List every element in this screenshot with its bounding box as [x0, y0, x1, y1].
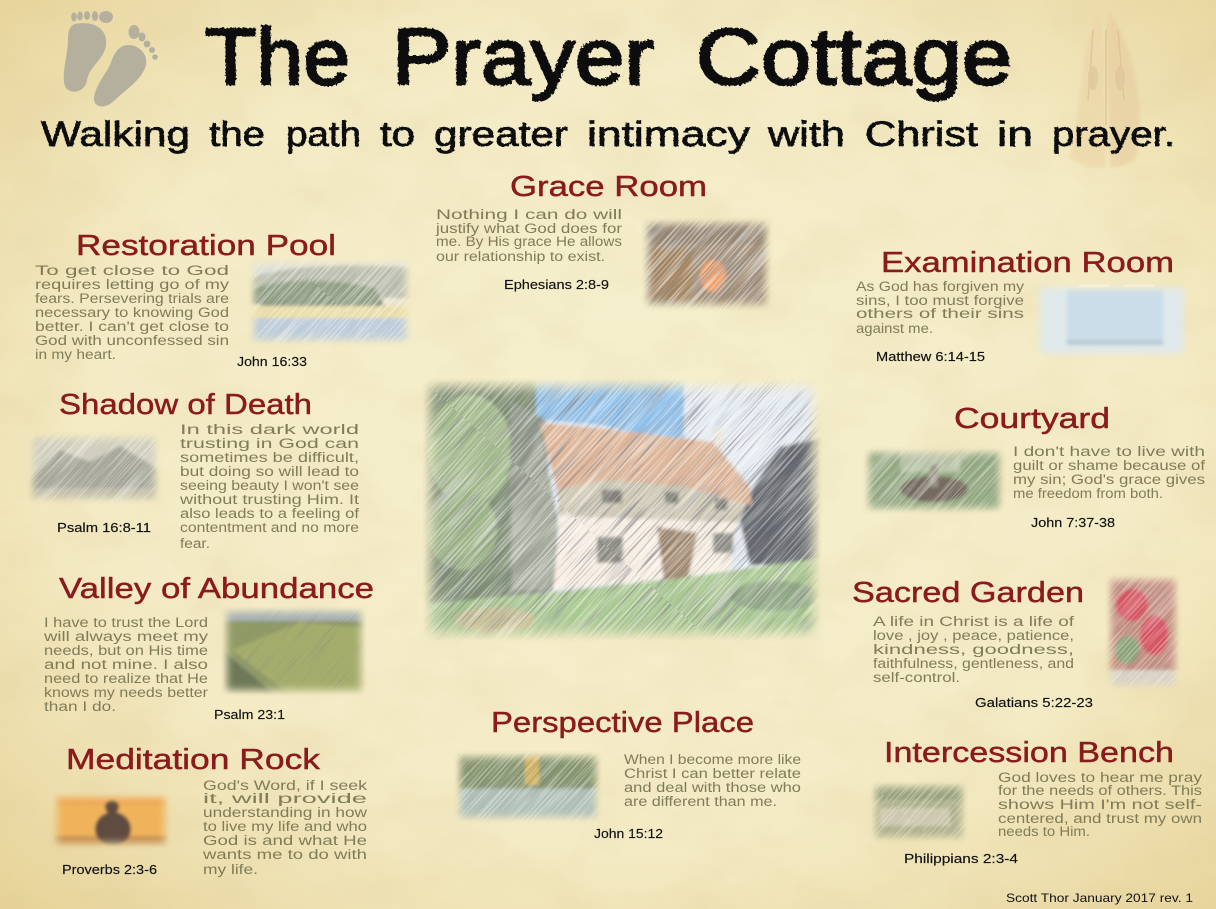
text: Courtyard description: my sin; God's grace gives — [1013, 472, 1205, 487]
text: Restoration Pool description: fears. Persevering trials are — [35, 291, 229, 306]
text: Shadow of Death description: contentment and no more — [180, 520, 359, 535]
text: Valley of Abundance description: knows my needs better — [44, 685, 209, 700]
text: Shadow of Death description: fear. — [180, 536, 210, 551]
title: Cottage — [696, 12, 1012, 101]
image: lake with trees — [455, 752, 601, 822]
text: Valley of Abundance description: I have to trust the Lord — [44, 615, 208, 630]
text: Grace Room description: our relationship to exist. — [436, 249, 605, 264]
text: Restoration Pool description: To get close to God — [35, 263, 229, 278]
text: Sacred Garden description — [873, 614, 1074, 685]
panel: Perspective Place — [455, 707, 801, 841]
subtitle: Christ — [865, 115, 978, 154]
text: Intercession Bench description: needs to Him. — [998, 824, 1090, 839]
text: Shadow of Death description: but doing so will lead to — [180, 464, 359, 479]
panel: Examination Room — [856, 247, 1190, 364]
text: Examination Room description: As God has forgiven my — [856, 279, 1024, 294]
text: Courtyard description: I don't have to live with — [1013, 444, 1205, 459]
text: Perspective Place description — [624, 752, 801, 809]
subtitle: in — [997, 115, 1033, 154]
text: Grace Room description: me. By His grace He allows — [436, 234, 622, 249]
heading: Restoration Pool: Restoration Pool — [76, 230, 336, 262]
text: Shadow of Death description: without trusting Him. It — [179, 492, 359, 507]
text: Intercession Bench description: centered, and trust my own — [998, 811, 1202, 826]
skylights — [1079, 286, 1154, 287]
image: terraced valley — [222, 607, 366, 695]
subtitle: greater — [434, 115, 568, 154]
reference: John 16:33: John 16:33 — [237, 354, 307, 369]
text: Shadow of Death description: also leads to a feeling of — [180, 506, 359, 521]
text: Meditation Rock description: to live my life and who — [203, 819, 367, 834]
text: Meditation Rock description: wants me to do with — [202, 847, 367, 862]
text: Restoration Pool description: in my heart. — [35, 347, 116, 362]
text: Shadow of Death description: sometimes be difficult, — [180, 450, 359, 465]
panel: Shadow of Death — [28, 389, 359, 551]
text: Sacred Garden description: faithfulness, gentleness, and — [873, 656, 1074, 671]
panel: Valley of Abundance — [43, 573, 374, 722]
text: Intercession Bench description: for the needs of others. This — [998, 783, 1202, 798]
text: Meditation Rock description — [202, 778, 367, 877]
reference: Psalm 23: Psalm 23:1 — [214, 707, 285, 722]
text: Sacred Garden description: love , joy , peace, patience, — [873, 628, 1074, 643]
text: Restoration Pool description: necessary to knowing God — [35, 305, 229, 320]
text: Shadow of Death description: In this dark world — [180, 422, 359, 437]
heading: Perspective Place: Perspective Place — [491, 707, 754, 739]
subtitle: with — [767, 115, 845, 154]
panel: Courtyard — [863, 403, 1205, 530]
title — [205, 12, 1012, 101]
text: Meditation Rock description: God is and what He — [203, 833, 367, 848]
text: Perspective Place description: Christ I can better relate — [624, 766, 801, 781]
image: rose trellis — [1106, 575, 1180, 690]
image: garden bench — [871, 782, 967, 842]
reference: John 15: John 15:12 — [594, 826, 663, 841]
subtitle: path — [286, 115, 361, 154]
text: Restoration Pool description: better. I can't get close to — [35, 319, 229, 334]
text: Shadow of Death description: seeing beauty I won't see — [180, 478, 359, 493]
subtitle: Walking — [41, 115, 190, 154]
subtitle — [41, 115, 1175, 154]
text: Restoration Pool description: God with unconfessed sin — [35, 333, 229, 348]
text: Courtyard description: guilt or shame because of — [1013, 458, 1205, 473]
panel: Meditation Rock — [52, 744, 367, 877]
reference: Ephesians: Ephesians 2:8-9 — [504, 277, 609, 292]
reference: Proverbs: Proverbs 2:3-6 — [62, 862, 157, 877]
reference: Matthew: Matthew 6:14-15 — [876, 349, 985, 364]
footer credit: Scott Thor January 2017 rev. 1 — [1006, 891, 1193, 905]
text: Sacred Garden description: self-control. — [873, 670, 960, 685]
image: sunset meditation — [52, 793, 170, 848]
text: Shadow of Death description — [179, 422, 359, 551]
text: Intercession Bench description: God loves to hear me pray — [998, 770, 1202, 785]
text: Perspective Place description: and deal with those who — [624, 780, 801, 795]
heading: Shadow of Death: Shadow of Death — [59, 389, 312, 421]
text: Examination Room description: sins, I too must forgive — [856, 293, 1024, 308]
text: Meditation Rock description: God's Word, if I seek — [203, 778, 367, 793]
subtitle: intimacy — [587, 115, 751, 154]
image: fireplace — [642, 218, 772, 310]
icon: footprints — [64, 11, 158, 106]
text: Intercession Bench description: shows Him I'm not self- — [998, 797, 1202, 812]
text: Restoration Pool description: requires letting go of my — [35, 277, 229, 292]
image: dark valley — [28, 433, 160, 503]
text: Sacred Garden description: kindness, goodness, — [873, 642, 1074, 657]
text: Perspective Place description: are different than me. — [624, 794, 777, 809]
subtitle: prayer. — [1052, 115, 1175, 154]
heading: Sacred Garden: Sacred Garden — [852, 577, 1084, 609]
image: white room — [1033, 282, 1190, 358]
text: Valley of Abundance description: than I do. — [44, 699, 116, 714]
panel: Restoration Pool — [35, 230, 412, 369]
text: Courtyard description — [1013, 444, 1205, 501]
text: Examination Room description: against me. — [856, 321, 933, 336]
panel: Sacred Garden — [852, 575, 1180, 710]
text: Intercession Bench description — [998, 770, 1202, 839]
text: Examination Room description: others of their sins — [856, 306, 1024, 321]
text: Valley of Abundance description: need to realize that He — [44, 671, 208, 686]
reference: John 7: John 7:37-38 — [1031, 515, 1115, 530]
text: Valley of Abundance description — [43, 615, 209, 714]
panel: Grace Room — [435, 171, 772, 310]
text: Valley of Abundance description: and not mine. I also — [44, 657, 208, 672]
subtitle: to — [380, 115, 415, 154]
text: Restoration Pool description — [35, 263, 229, 362]
text: Shadow of Death description: trusting in God can — [180, 436, 359, 451]
text: Courtyard description: me freedom from both. — [1013, 486, 1163, 501]
reference: Galatians: Galatians 5:22-23 — [975, 695, 1093, 710]
text: Grace Room description: Nothing I can do will — [436, 207, 622, 222]
reference: Psalm 16: Psalm 16:8-11 — [57, 520, 151, 535]
heading: Grace Room: Grace Room — [510, 171, 707, 203]
text: Grace Room description: justify what God does for — [435, 221, 623, 236]
text: Valley of Abundance description: needs, but on His time — [44, 643, 208, 658]
title: Prayer — [392, 12, 654, 101]
image: cottage — [424, 380, 820, 640]
text: Examination Room description — [856, 279, 1024, 336]
heading: Examination Room: Examination Room — [881, 247, 1174, 279]
reference: Philippians: Philippians 2:3-4 — [904, 851, 1018, 866]
text: Perspective Place description: When I become more like — [624, 752, 801, 767]
text: Meditation Rock description: understanding in how — [203, 805, 367, 820]
subtitle: the — [209, 115, 265, 154]
panel: Intercession Bench — [871, 737, 1202, 866]
heading: Courtyard: Courtyard — [954, 403, 1110, 435]
icon: praying hands — [1069, 13, 1140, 167]
text: Meditation Rock description: my life. — [203, 862, 258, 877]
title: The — [205, 12, 350, 101]
text: Grace Room description — [435, 207, 623, 264]
text: Valley of Abundance description: will always meet my — [43, 629, 208, 644]
text: Meditation Rock description: it, will provide — [203, 791, 367, 806]
image: mountain pool — [248, 258, 412, 345]
heading: Intercession Bench: Intercession Bench — [884, 737, 1174, 769]
heading: Meditation Rock: Meditation Rock — [66, 744, 321, 776]
text: Sacred Garden description: A life in Christ is a life of — [873, 614, 1074, 629]
image: fountain — [863, 448, 1005, 513]
heading: Valley of Abundance: Valley of Abundance — [59, 573, 374, 605]
